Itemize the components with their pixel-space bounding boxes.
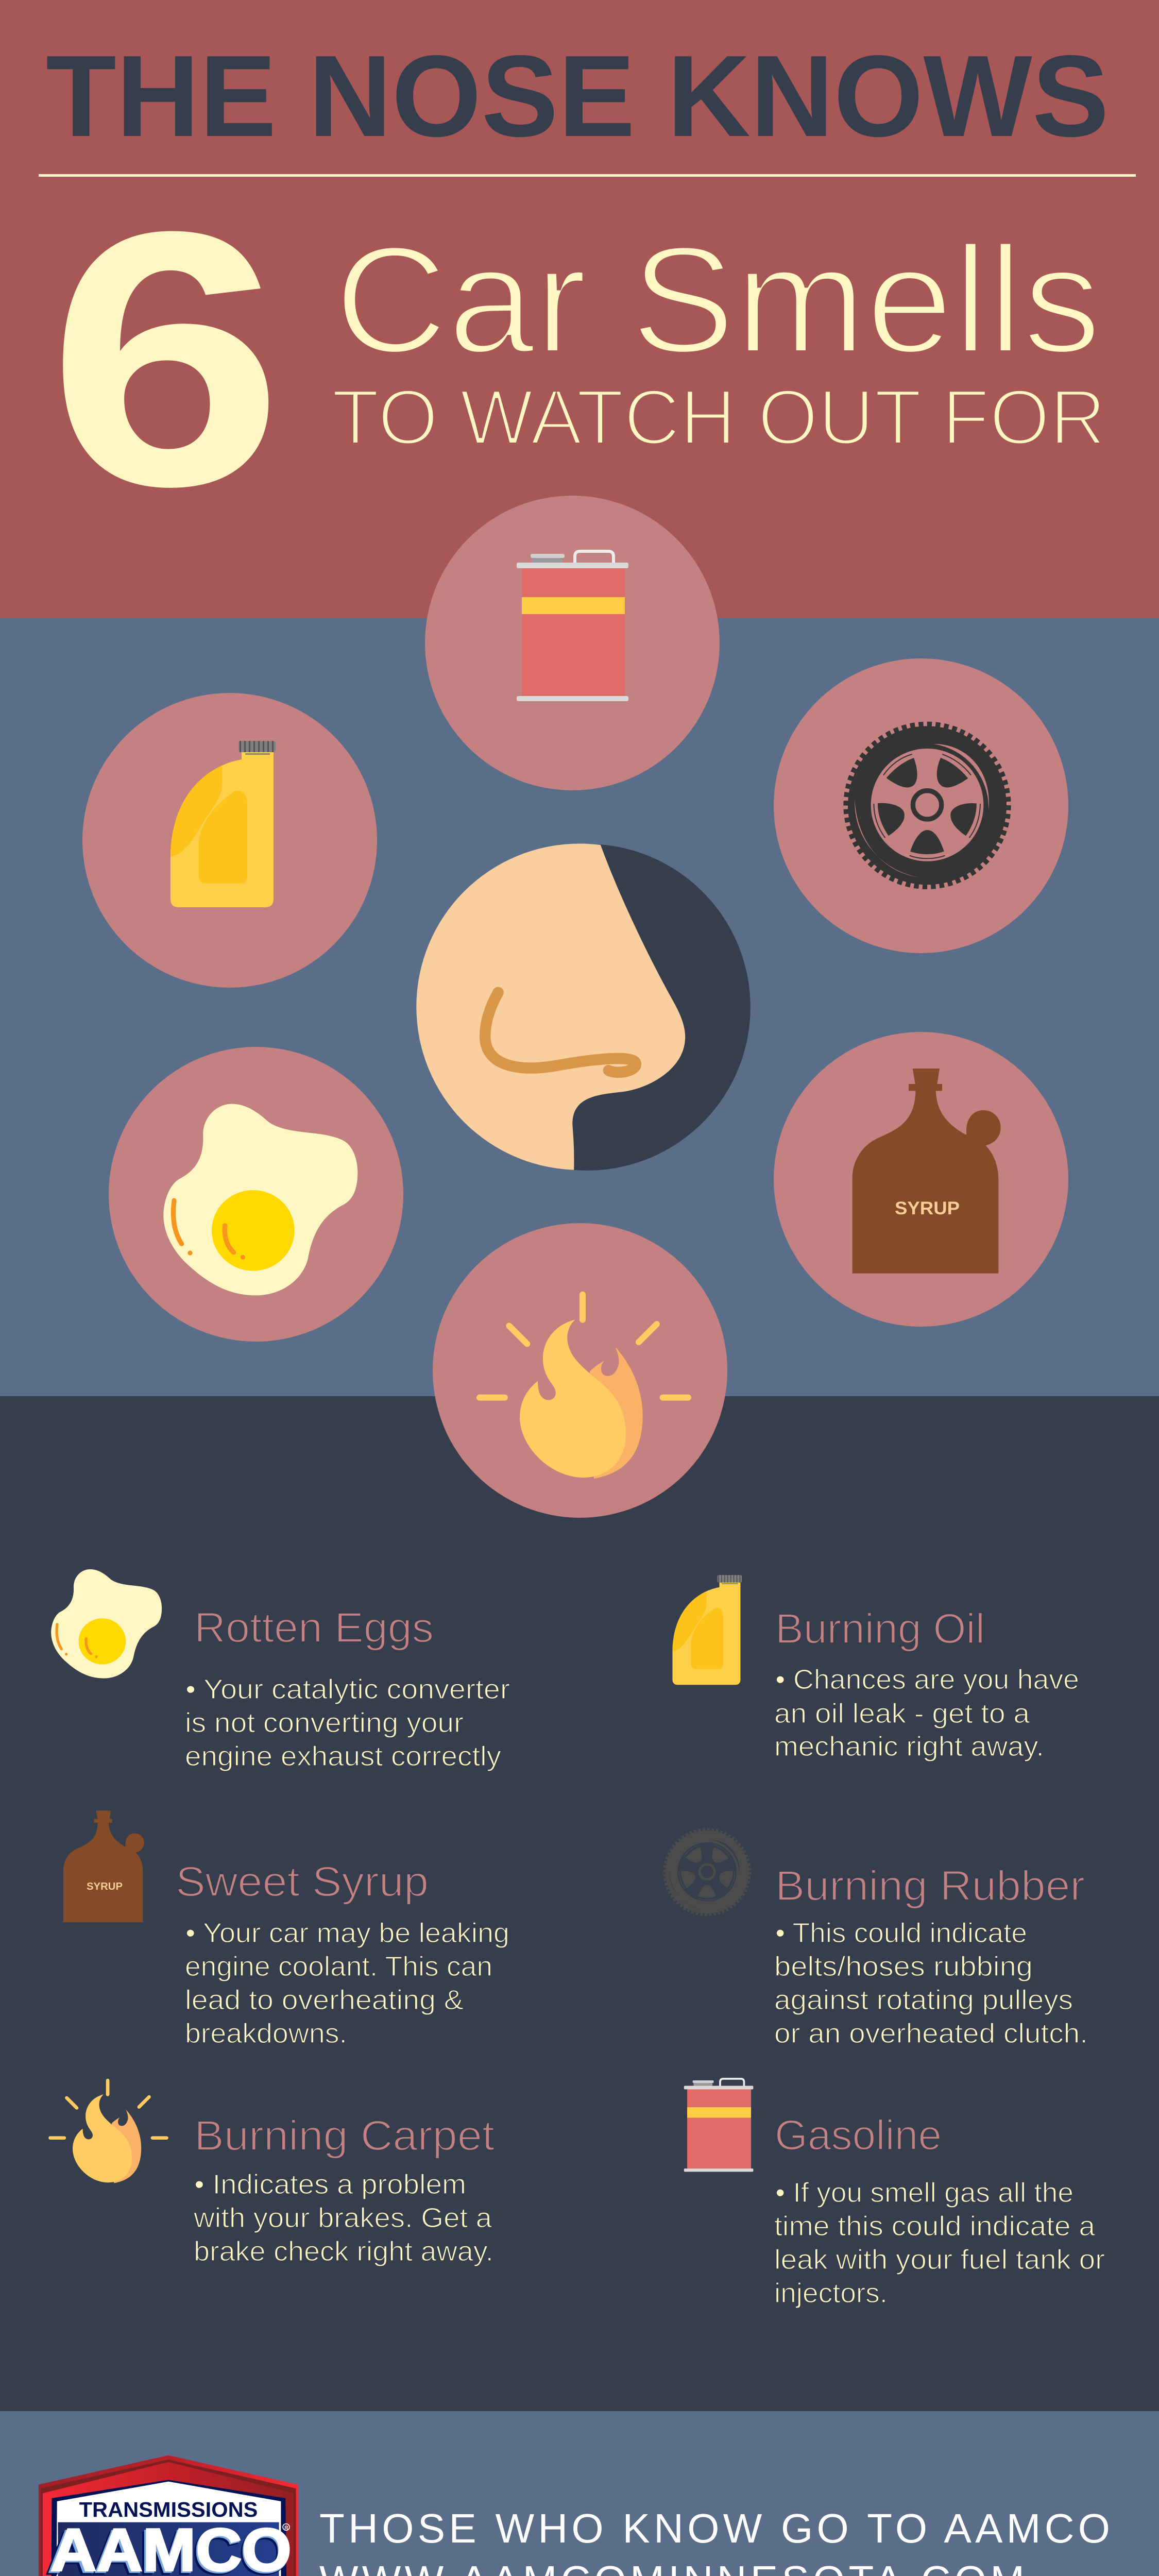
item: burning carpet [50, 2080, 495, 2267]
subtitle: to watch out for: TO WATCH OUT FOR [332, 374, 1106, 461]
footer text: slogan: THOSE WHO KNOW GO TO AAMCO [319, 2505, 1110, 2551]
subtitle: car smells: Car Smells [334, 214, 1101, 385]
icon: syrup jug [63, 1810, 144, 1922]
text: rotten eggs description [185, 1674, 510, 1772]
text: sweet syrup description: • Your car may be leaking [185, 1918, 509, 1948]
icon circle: flame [433, 1223, 727, 1518]
panel: header background [0, 0, 1159, 618]
text: burning carpet description: brake check right away. [194, 2236, 493, 2267]
text: rotten eggs description: is not converting your [185, 1707, 464, 1738]
heading: gasoline: Gasoline [775, 2112, 942, 2159]
icon circle: syrup jug [774, 1032, 1068, 1327]
logo: AAMCO badge [39, 2455, 298, 2576]
panel: footer background [0, 2411, 1159, 2576]
icon: oil bottle [669, 1575, 742, 1685]
logo: AAMCO badge: TRANSMISSIONS [79, 2498, 258, 2521]
text: burning oil description: an oil leak - get to a [774, 1698, 1030, 1729]
text: gasoline description: injectors. [774, 2278, 888, 2309]
item: rotten eggs [51, 1569, 510, 1772]
text: burning carpet description [193, 2169, 493, 2267]
item: sweet syrup [63, 1810, 509, 2049]
title: THE NOSE KNOWS [46, 31, 1109, 161]
icon circle: egg [109, 1047, 403, 1342]
icon: flame [50, 2080, 166, 2183]
icon circle: gasoline can [425, 496, 720, 790]
panel: smell descriptions background [0, 1396, 1159, 2411]
item: gasoline [684, 2079, 1105, 2309]
text: gasoline description: • If you smell gas all the [775, 2177, 1073, 2208]
text: burning oil description [774, 1664, 1079, 1762]
icon: gasoline can [684, 2079, 753, 2172]
icon: egg [51, 1569, 162, 1679]
big number 6: 6 [47, 157, 284, 562]
icon: syrup jug: SYRUP [87, 1881, 123, 1892]
text: sweet syrup description: lead to overheating & [185, 1985, 464, 2015]
heading: burning carpet: Burning Carpet [194, 2112, 495, 2159]
item: burning rubber [664, 1829, 1088, 2049]
text: burning oil description: • Chances are you have [775, 1664, 1079, 1695]
text: burning rubber description: against rotating pulleys [774, 1985, 1073, 2015]
text: rotten eggs description: engine exhaust correctly [185, 1741, 501, 1772]
text: sweet syrup description: breakdowns. [185, 2018, 347, 2049]
icon circle: tire [774, 658, 1068, 953]
text: gasoline description: leak with your fuel tank or [774, 2244, 1105, 2275]
panel: icon ring background [0, 618, 1159, 1396]
heading: burning oil: Burning Oil [775, 1605, 985, 1652]
text: gasoline description [774, 2177, 1105, 2309]
text: burning rubber description: or an overheated clutch. [774, 2018, 1088, 2049]
text: sweet syrup description [185, 1918, 509, 2049]
text: burning oil description: mechanic right away. [774, 1731, 1044, 1762]
text: burning carpet description: • Indicates a problem [194, 2169, 466, 2200]
heading: burning rubber: Burning Rubber [775, 1862, 1085, 1909]
text: burning carpet description: with your brakes. Get a [193, 2202, 492, 2233]
heading: rotten eggs: Rotten Eggs [194, 1604, 434, 1651]
icon circle: oil bottle [82, 693, 377, 988]
text: burning rubber description [774, 1918, 1088, 2049]
text: gasoline description: time this could indicate a [774, 2211, 1096, 2242]
text: burning rubber description: belts/hoses rubbing [774, 1951, 1033, 1982]
icon: tire [664, 1829, 750, 1915]
text: sweet syrup description: engine coolant. This can [185, 1951, 492, 1982]
heading: sweet syrup: Sweet Syrup [176, 1858, 429, 1905]
item: burning oil [669, 1575, 1079, 1762]
text: burning rubber description: • This could indicate [775, 1918, 1027, 1948]
logo: AAMCO badge: R [284, 2526, 288, 2531]
central nose illustration [416, 843, 751, 1171]
text: rotten eggs description: • Your catalytic converter [185, 1674, 510, 1705]
icon circle: syrup jug: SYRUP [895, 1198, 960, 1218]
